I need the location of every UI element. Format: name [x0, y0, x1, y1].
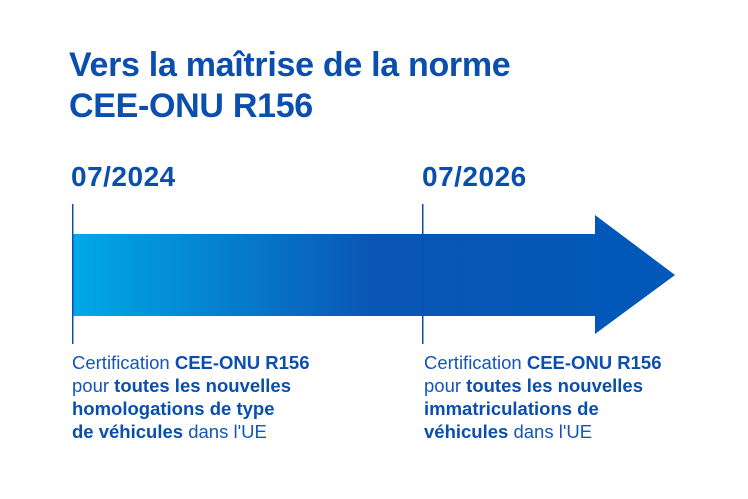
text 2 — [424, 352, 662, 442]
date 1: 07/2024 — [71, 161, 176, 192]
text 1: Certification CEE-ONU R156 — [72, 352, 310, 373]
text 1: pour toutes les nouvelles — [72, 375, 291, 396]
text 2: véhicules dans l'UE — [424, 421, 592, 442]
text 1 — [72, 352, 310, 442]
title: CEE-ONU R156 — [69, 87, 313, 125]
date 2: 07/2026 — [422, 161, 527, 192]
title: Vers la maîtrise de la norme — [69, 46, 510, 84]
text 1: homologations de type — [72, 398, 274, 419]
text 2: immatriculations de — [424, 398, 599, 419]
text 1: de véhicules dans l'UE — [72, 421, 267, 442]
text 2: pour toutes les nouvelles — [424, 375, 643, 396]
text 2: Certification CEE-ONU R156 — [424, 352, 662, 373]
title — [69, 46, 510, 125]
